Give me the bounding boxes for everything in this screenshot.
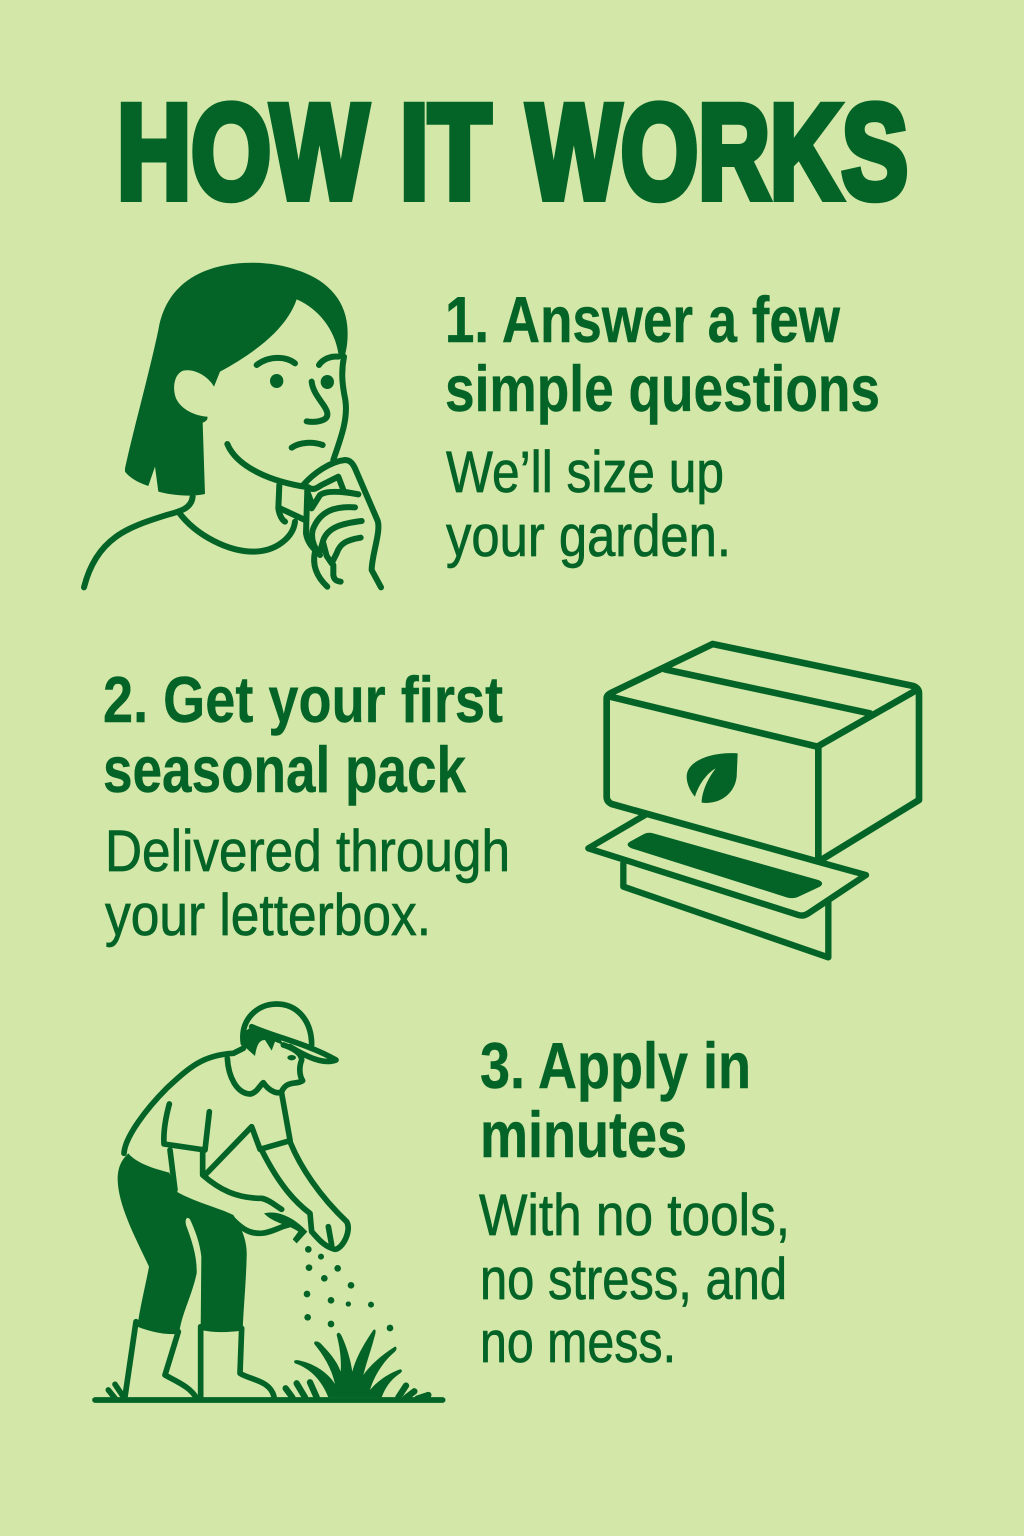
icon: thinking woman [84,263,381,587]
icon: parcel box and letterbox [588,644,919,957]
step 3 text [479,1029,790,1375]
eye [287,1055,296,1060]
seeds [304,1246,393,1331]
trousers [118,1153,247,1334]
icon: gardener spreading seed [95,1004,443,1400]
leaf logo [687,753,738,803]
step 3 description: no stress, and [480,1247,787,1312]
step 2 description [105,819,510,948]
title [117,78,908,227]
step 2 heading: seasonal pack [103,733,467,806]
step 2 heading [103,663,503,806]
step 1 heading [445,283,880,425]
eyes [270,374,334,389]
hair [125,263,348,496]
step 3 heading: minutes [480,1098,687,1171]
step 1 text [445,283,880,569]
step 2 heading: 2. Get your first [103,663,503,736]
step 1 description: your garden. [446,504,731,569]
box [607,644,919,862]
grass tuft [294,1330,402,1397]
step 3 heading [480,1029,751,1171]
body lines [95,1004,443,1400]
step 3 heading: 3. Apply in [480,1029,751,1102]
title: HOW [117,78,368,227]
step 3 description: With no tools, [479,1183,790,1248]
hand and scoop [264,1212,307,1243]
step 3 description: no mess. [480,1310,676,1375]
step 2 text [103,663,510,948]
step 1 description: We’ll size up [446,440,724,505]
step 2 description: your letterbox. [105,883,431,948]
face and body lines [84,357,381,587]
step 3 description [479,1183,790,1375]
small grass blades [286,1382,428,1399]
step 2 description: Delivered through [105,819,510,884]
step 1 description [446,440,731,569]
letterbox [588,815,866,957]
hair and cap [242,1027,283,1056]
title: IT [400,78,491,227]
step 1 heading: simple questions [445,352,880,425]
step 1 heading: 1. Answer a few [445,283,840,356]
